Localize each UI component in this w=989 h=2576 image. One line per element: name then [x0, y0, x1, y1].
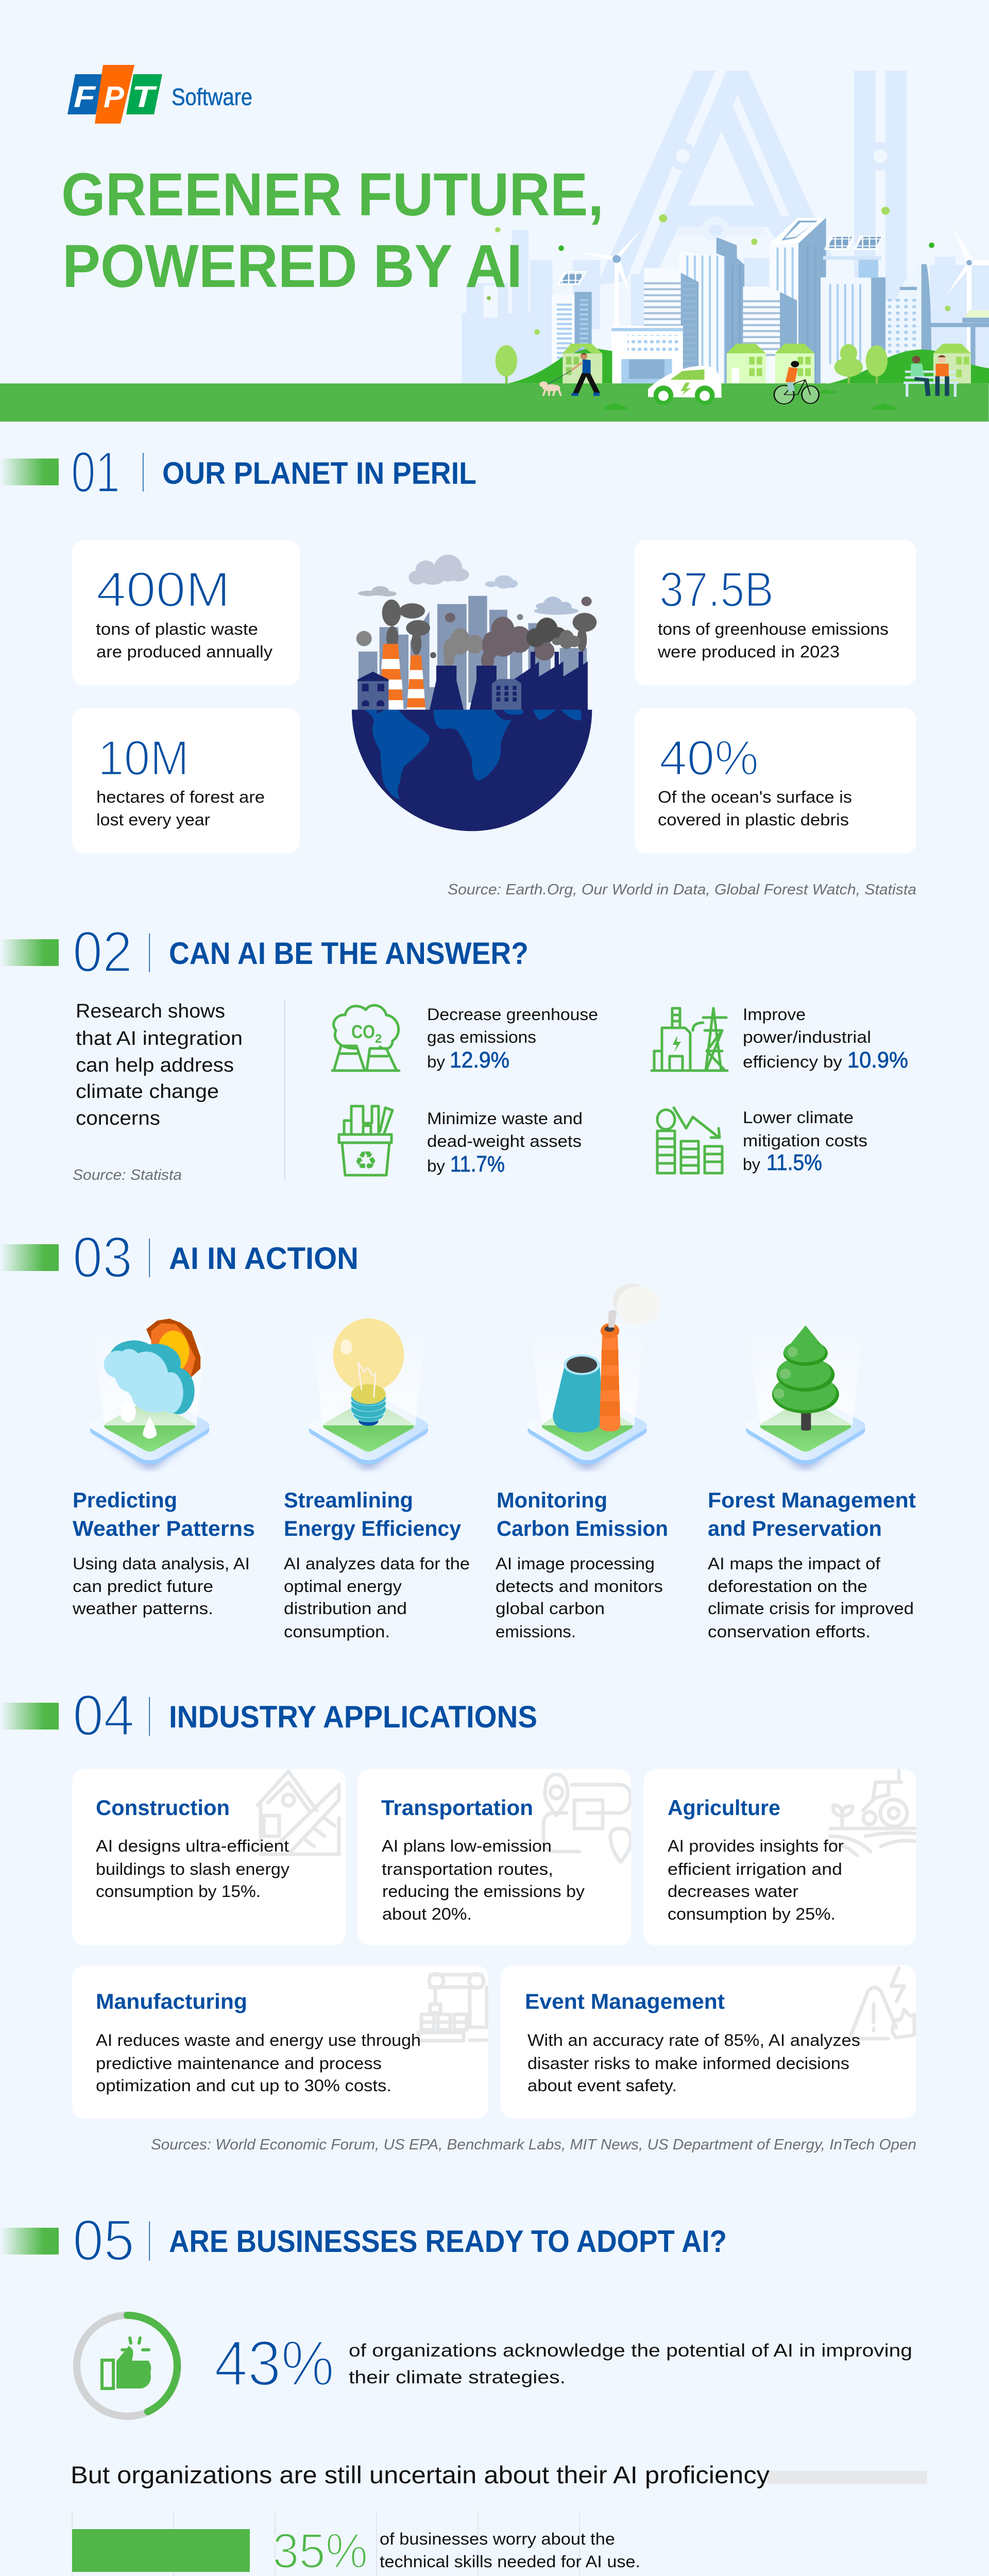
card: construction: AI designs ultra-efficient: [96, 1837, 289, 1855]
section heading 04: [0, 1683, 537, 1748]
stat card: 37.5B: were produced in 2023: [657, 642, 840, 661]
factories and cooling towers: [430, 652, 588, 709]
logo: FPT Software: P: [104, 80, 124, 114]
43% stat: their climate strategies.: [349, 2367, 566, 2387]
column: forest management and preservation: [708, 1488, 916, 1641]
annotation 35%: of businesses worry about the: [380, 2530, 615, 2548]
column: forest management and preservation: climate crisis for improved: [708, 1599, 914, 1618]
stat card: 40%: covered in plastic debris: [658, 810, 849, 829]
card: event management: [501, 1965, 916, 2119]
column: forest management and preservation: AI maps the impact of: [708, 1554, 880, 1573]
column: streamlining energy efficiency: optimal energy: [284, 1577, 402, 1596]
stat card: 37.5B: 37.5B: [659, 562, 774, 617]
column: forest management and preservation: conservation efforts.: [708, 1622, 871, 1641]
electric car: [648, 366, 722, 405]
column: forest management and preservation: deforestation on the: [708, 1577, 867, 1596]
card: manufacturing: optimization and cut up to 30% costs.: [96, 2076, 391, 2095]
section heading 02: CAN AI BE THE ANSWER?: [169, 936, 528, 971]
text: greenhouse gas: by: [427, 1053, 445, 1071]
city towers: [552, 217, 989, 383]
section heading 04: INDUSTRY APPLICATIONS: [169, 1700, 537, 1734]
skyline: [359, 596, 587, 709]
column: monitoring carbon emission: Monitoring: [497, 1488, 607, 1512]
column: streamlining energy efficiency: [284, 1488, 470, 1641]
column: streamlining energy efficiency: Streamlining: [284, 1488, 413, 1512]
column: streamlining energy efficiency: distribution and: [284, 1599, 407, 1618]
half globe: [352, 709, 592, 831]
title: GREENER FUTURE,: [61, 161, 604, 229]
houses: [562, 344, 971, 383]
card: transportation: Transportation: [381, 1795, 533, 1820]
isometric illustrations: [90, 1284, 865, 1472]
column: predicting weather patterns: can predict future: [73, 1577, 213, 1596]
column: monitoring carbon emission: global carbon: [496, 1599, 605, 1618]
card: construction: Construction: [96, 1795, 230, 1820]
subheading with grey bar: But organizations are still uncertain about their AI proficiency: [71, 2461, 770, 2488]
section heading 03: AI IN ACTION: [169, 1241, 359, 1276]
43% stat: of organizations acknowledge the potential of AI in improving: [349, 2341, 912, 2361]
icon: robot arm watermark: [416, 1972, 488, 2042]
title: [61, 161, 604, 300]
source note section 2: Source: Statista: [73, 1167, 182, 1183]
icon: warning and flame watermark: [849, 1966, 916, 2040]
logo: FPT Software: Software: [172, 83, 252, 110]
title: POWERED BY AI: [62, 232, 522, 300]
section heading 01: [0, 440, 476, 504]
small houses: [357, 671, 521, 709]
icon: CO2 cloud and cooling towers: [332, 1005, 399, 1071]
bar chart: AI proficiency concerns: [68, 2511, 919, 2576]
section heading 05: 05: [73, 2208, 134, 2273]
stat card: 10M: [72, 708, 300, 854]
icon: CO2 cloud and cooling towers: CO: [351, 1021, 375, 1042]
column: predicting weather patterns: Weather Patterns: [73, 1516, 255, 1540]
stat card: 400M: [72, 540, 300, 686]
column: streamlining energy efficiency: Energy Efficiency: [284, 1516, 462, 1540]
section heading 02: 02: [73, 920, 132, 984]
platform and light bulb: [309, 1318, 428, 1472]
stat card: 400M: tons of plastic waste: [96, 620, 258, 638]
section heading 05: [0, 2208, 727, 2273]
card: construction: consumption by 15%.: [96, 1882, 261, 1901]
card: event management: disaster risks to make informed decisions: [527, 2054, 849, 2073]
intro text section 2: can help address: [76, 1055, 234, 1076]
section heading 03: 03: [73, 1225, 132, 1290]
text: waste: by: [427, 1157, 445, 1175]
clouds: [358, 555, 578, 615]
text: greenhouse gas: 12.9%: [450, 1047, 509, 1073]
card: transportation: reducing the emissions by: [382, 1882, 585, 1901]
intro text section 2: [76, 1001, 243, 1129]
logo: FPT Software: T: [132, 80, 158, 114]
column: monitoring carbon emission: detects and monitors: [496, 1577, 663, 1596]
people on bench: [903, 355, 958, 397]
card: manufacturing: [72, 1965, 488, 2119]
card: agriculture: Agriculture: [668, 1795, 780, 1820]
logo: FPT Software: [67, 65, 252, 124]
platform and weather: [90, 1318, 209, 1472]
stat card: 400M: 400M: [96, 562, 230, 617]
trees: [496, 344, 888, 383]
section heading 04: 04: [73, 1683, 134, 1748]
card: manufacturing: Manufacturing: [96, 1989, 247, 2013]
icon: tractor and field watermark: [828, 1769, 916, 1857]
text: greenhouse gas: Decrease greenhouse: [427, 1005, 598, 1024]
stat card: 10M: 10M: [98, 731, 189, 786]
icon: power plant and pylon: [652, 1008, 727, 1071]
icon: route and bus watermark: [542, 1772, 631, 1864]
card: event management: about event safety.: [527, 2076, 677, 2095]
column: monitoring carbon emission: [496, 1488, 668, 1641]
stat card: 37.5B: [634, 540, 916, 686]
text: efficiency: Improve: [743, 1005, 806, 1024]
bushes: [604, 389, 896, 410]
stat card: 400M: are produced annually: [96, 642, 272, 661]
card: construction: buildings to slash energy: [96, 1860, 289, 1878]
card: agriculture: efficient irrigation and: [668, 1860, 842, 1878]
source note section 1: Source: Earth.Org, Our World in Data, Global Forest Watch, Statista: [448, 882, 916, 898]
card: agriculture: AI provides insights for: [668, 1837, 844, 1855]
column: streamlining energy efficiency: consumption.: [284, 1622, 390, 1641]
smoke: [356, 597, 596, 670]
annotation 35%: [272, 2523, 640, 2576]
green hills: [508, 348, 989, 383]
column: predicting weather patterns: weather patterns.: [72, 1599, 213, 1618]
intro text section 2: climate change: [76, 1081, 219, 1103]
column: forest management and preservation: and Preservation: [708, 1516, 882, 1540]
man walking dog: [539, 353, 600, 396]
card: event management: Event Management: [525, 1989, 725, 2013]
icon: house and ruler watermark: [255, 1769, 341, 1856]
card: manufacturing: AI reduces waste and energy use through: [96, 2031, 421, 2049]
icon: thumbs up: [102, 2338, 151, 2388]
stat card: 40%: Of the ocean's surface is: [658, 788, 852, 806]
letters AI backdrop: [597, 71, 907, 301]
section heading 01: OUR PLANET IN PERIL: [162, 456, 476, 490]
striped chimneys: [379, 644, 425, 709]
hero illustration: big AI letters and green city: [0, 71, 989, 421]
column: predicting weather patterns: Using data analysis, AI: [73, 1554, 250, 1573]
text: mitigation: Lower climate: [743, 1108, 854, 1127]
section heading 05: ARE BUSINESSES READY TO ADOPT AI?: [169, 2224, 727, 2259]
text: mitigation: by: [743, 1155, 760, 1174]
card: transportation: AI plans low-emission: [382, 1837, 552, 1855]
stat card: 37.5B: tons of greenhouse emissions: [658, 620, 889, 638]
column: monitoring carbon emission: emissions.: [496, 1622, 576, 1641]
stat card: 40%: 40%: [659, 731, 759, 786]
stat card: 10M: lost every year: [96, 810, 210, 829]
intro text section 2: concerns: [76, 1108, 160, 1129]
text: greenhouse gas: [427, 1005, 598, 1073]
stat card: 40%: [634, 708, 916, 854]
intro text section 2: that AI integration: [76, 1028, 243, 1049]
text: waste: dead-weight assets: [427, 1132, 582, 1150]
annotation 35%: technical skills needed for AI use.: [380, 2552, 640, 2571]
card: agriculture: decreases water: [668, 1882, 798, 1901]
backdrop buildings: [462, 230, 989, 383]
illustration: polluted planet: [352, 555, 596, 831]
card: agriculture: consumption by 25%.: [668, 1905, 835, 1923]
card: event management: With an accuracy rate of 85%, AI analyzes: [527, 2031, 860, 2049]
icon: recycling bin: ♻: [354, 1146, 377, 1176]
column: forest management and preservation: Forest Management: [708, 1488, 916, 1512]
text: mitigation: mitigation costs: [743, 1131, 867, 1150]
column: streamlining energy efficiency: AI analyzes data for the: [284, 1554, 470, 1573]
card: transportation: about 20%.: [382, 1905, 472, 1923]
icon: recycling bin: [339, 1106, 393, 1176]
text: mitigation: [743, 1108, 867, 1175]
column: predicting weather patterns: Predicting: [73, 1488, 177, 1512]
text: efficiency: [743, 1005, 908, 1073]
source note section 4: Sources: World Economic Forum, US EPA, Benchmark Labs, MIT News, US Department of Energy, InTech Open: [151, 2137, 916, 2153]
text: efficiency: power/industrial: [743, 1028, 871, 1046]
text: waste: [427, 1109, 583, 1177]
cyclist: [774, 361, 819, 404]
stat card: 10M: hectares of forest are: [96, 788, 265, 806]
column: monitoring carbon emission: Carbon Emission: [497, 1516, 668, 1540]
platform and tree: [746, 1320, 865, 1472]
platform and smokestack: [527, 1284, 661, 1472]
section heading 01: 01: [71, 440, 120, 504]
intro text section 2: Research shows: [76, 1001, 225, 1022]
column: monitoring carbon emission: AI image processing: [496, 1554, 655, 1573]
text: efficiency: 10.9%: [847, 1047, 908, 1073]
ring gauge 43% with thumbs-up icon: [77, 2315, 178, 2416]
section heading 02: [0, 920, 528, 984]
text: efficiency: efficiency by: [743, 1053, 842, 1071]
text: waste: 11.7%: [450, 1151, 505, 1177]
card: agriculture: [643, 1769, 916, 1945]
logo: FPT Software: F: [74, 80, 96, 114]
wind turbines: [579, 228, 989, 383]
icon: coins and falling arrow: [657, 1108, 722, 1173]
column: predicting weather patterns: [72, 1488, 255, 1618]
bar: 35%: [72, 2529, 250, 2572]
text: mitigation: 11.5%: [766, 1150, 822, 1175]
card: construction: [72, 1769, 346, 1945]
section heading 03: [0, 1225, 359, 1290]
text: greenhouse gas: gas emissions: [427, 1028, 536, 1046]
icon: CO2 cloud and cooling towers: 2: [375, 1032, 382, 1046]
card: transportation: transportation routes,: [382, 1860, 553, 1878]
43% stat: 43%: [214, 2328, 334, 2399]
ground band: [0, 383, 989, 421]
card: manufacturing: predictive maintenance and process: [96, 2054, 382, 2073]
43% stat: [214, 2328, 912, 2399]
text: waste: Minimize waste and: [427, 1109, 583, 1128]
card: transportation: [357, 1769, 631, 1945]
floating dots: [487, 207, 950, 335]
